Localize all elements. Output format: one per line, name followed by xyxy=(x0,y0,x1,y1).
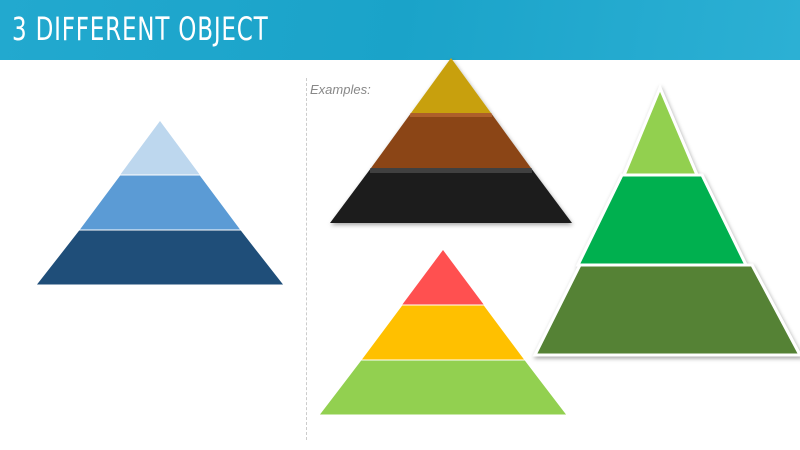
examples label: Examples: xyxy=(310,82,371,97)
green tree pyramid xyxy=(535,88,800,355)
header banner xyxy=(0,0,800,60)
dark 3d pyramid xyxy=(330,58,572,223)
divider xyxy=(306,78,307,440)
title: 3 DIFFERENT OBJECT xyxy=(12,10,268,48)
colorful pyramid xyxy=(319,250,567,415)
blue pyramid xyxy=(36,121,284,285)
